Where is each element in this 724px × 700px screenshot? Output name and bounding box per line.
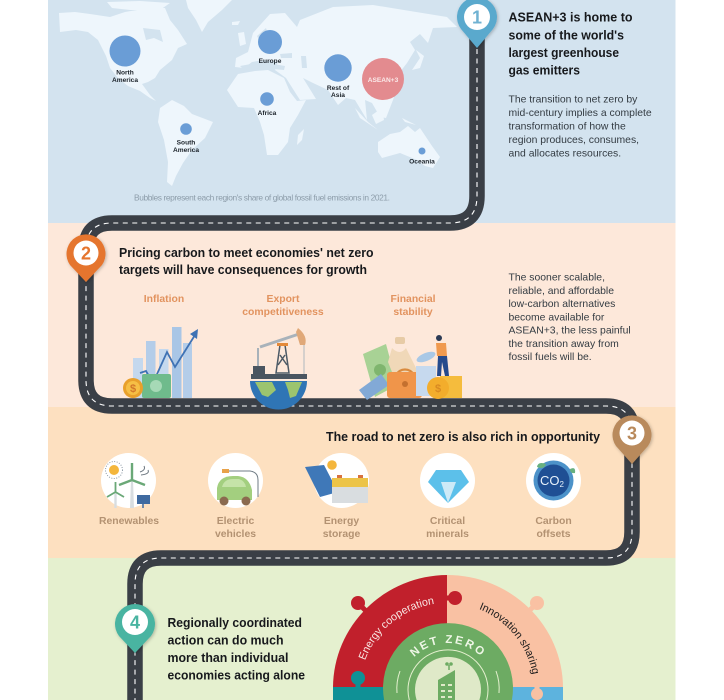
heading: step 4: more than individual (168, 651, 288, 665)
panel: regional coordination background (48, 558, 676, 700)
pin 4: 4 (130, 612, 140, 632)
puzzle piece: energy cooperation (333, 575, 462, 687)
icon: carbon offsets: 2 (560, 480, 565, 489)
text: step 1 body: The transition to net zero by (508, 94, 638, 106)
bubble: Oceania (409, 148, 435, 166)
heading: step 2: targets will have consequences for growth (119, 263, 367, 277)
label: Critical minerals: Critical (430, 516, 465, 527)
label: Inflation: Inflation (144, 294, 184, 305)
road (86, 30, 632, 700)
icon: energy storage (305, 453, 369, 508)
icon: carbon offsets: CO (540, 473, 560, 488)
bubble: North America (110, 36, 140, 84)
heading: step 4: economies acting alone (168, 668, 305, 682)
heading: step 2 (119, 246, 374, 277)
bubble: Oceania: Oceania (409, 158, 435, 166)
icon: carbon offsets (526, 453, 581, 508)
pin 2: 2 (81, 244, 91, 264)
pin 2 (66, 234, 106, 282)
label: Renewables: Renewables (99, 516, 159, 527)
bubble: South America: South (177, 140, 195, 146)
text: step 2 body: the transition away from (508, 339, 619, 350)
map caption: Bubbles represent each region's share of global fossil fuel emissions in 2021. (134, 192, 390, 202)
label: Electric vehicles: vehicles (215, 529, 256, 540)
net zero circle (383, 623, 513, 700)
heading: step 4: action can do much (168, 634, 284, 648)
bubble: Rest of Asia: Rest of (327, 85, 350, 92)
text: step 2 body: become available for (508, 312, 605, 323)
heading: step 1: largest greenhouse (508, 46, 619, 60)
pin 1 (457, 0, 497, 48)
puzzle piece: innovation sharing: Innovation sharing (480, 602, 538, 674)
icon: inflation chart (123, 327, 198, 398)
label: Export competitiveness: competitiveness (242, 307, 324, 318)
bubble: North America: America (112, 77, 138, 84)
label: Carbon offsets: Carbon (535, 516, 572, 527)
icon: oil pump on globe (250, 328, 307, 410)
puzzle piece: innovation sharing (447, 575, 563, 700)
label: Energy storage (323, 516, 360, 540)
heading: step 1: ASEAN+3 is home to (508, 10, 633, 24)
bubble: South America (173, 123, 199, 154)
bubble: North America: North (116, 70, 134, 76)
pin 1: 1 (472, 8, 482, 28)
puzzle piece: blue (447, 687, 563, 700)
heading: step 2: Pricing carbon to meet economies' net zero (119, 246, 374, 260)
bubble: Rest of Asia: Asia (331, 92, 345, 99)
heading: step 1: gas emitters (508, 64, 580, 78)
icon: critical minerals (420, 453, 475, 508)
label: Export competitiveness (242, 294, 324, 318)
label: Energy storage: storage (323, 529, 360, 540)
panel: pricing carbon background (48, 223, 676, 407)
bubble: Rest of Asia (324, 54, 352, 99)
text: step 1 body: mid-century implies a complete (508, 108, 652, 119)
icon: renewables (101, 453, 156, 508)
bubble: South America: America (173, 147, 199, 154)
icon: green building (438, 662, 455, 700)
text: step 1 body: and allocates resources. (508, 148, 621, 160)
label: Financial stability: stability (393, 307, 433, 318)
puzzle piece: energy cooperation: Energy cooperation (358, 598, 434, 660)
text: step 2 body: ASEAN+3, the less painful (508, 326, 631, 336)
icon: inflation chart: $ (130, 383, 136, 395)
net zero circle: NET ZERO (410, 635, 484, 657)
heading: step 1 (508, 10, 633, 78)
label: Export competitiveness: Export (267, 294, 300, 305)
label: Carbon offsets (535, 516, 572, 540)
bubble: ASEAN+3: ASEAN+3 (368, 77, 399, 84)
bubble: Africa: Africa (258, 110, 277, 117)
text: step 1 body: transformation of how the (508, 122, 626, 132)
world map (59, 0, 457, 186)
label: Energy storage: Energy (324, 516, 359, 527)
bubble: ASEAN+3 (362, 58, 404, 100)
bubble: Europe (258, 30, 282, 65)
heading: step 4: Regionally coordinated (168, 616, 302, 630)
pin 3 (612, 415, 652, 464)
heading: step 3: The road to net zero is also rich in opportunity (326, 430, 600, 444)
panel: emitters background (48, 0, 676, 223)
label: Critical minerals (426, 516, 469, 540)
puzzle diagram (333, 575, 563, 700)
label: Financial stability: Financial (390, 294, 436, 305)
label: Financial stability (390, 294, 436, 318)
label: Electric vehicles (215, 516, 256, 540)
text: step 2 body: reliable, and affordable (508, 286, 614, 297)
icon: financial stability (359, 335, 462, 400)
label: Carbon offsets: offsets (536, 529, 571, 540)
bubble: Africa (258, 92, 277, 117)
heading: step 4 (168, 616, 305, 682)
bubble: Europe: Europe (259, 58, 282, 65)
icon: electric vehicle (208, 453, 263, 508)
map: inland seas (143, 28, 307, 70)
text: step 1 body (508, 94, 652, 160)
text: step 2 body: fossil fuels will be. (508, 352, 592, 363)
text: step 2 body (508, 272, 631, 363)
label: Electric vehicles: Electric (217, 516, 254, 527)
label: Critical minerals: minerals (426, 529, 469, 540)
text: step 2 body: low-carbon alternatives (508, 299, 615, 310)
icon: financial stability: $ (435, 383, 441, 395)
puzzle piece: teal (333, 671, 447, 700)
pin 3: 3 (627, 424, 637, 444)
heading: step 1: some of the world's (508, 28, 624, 42)
text: step 1 body: region produces, consumes, (508, 135, 639, 146)
pin 4 (115, 604, 155, 653)
text: step 2 body: The sooner scalable, (508, 272, 605, 284)
panel: opportunity background (48, 407, 676, 558)
